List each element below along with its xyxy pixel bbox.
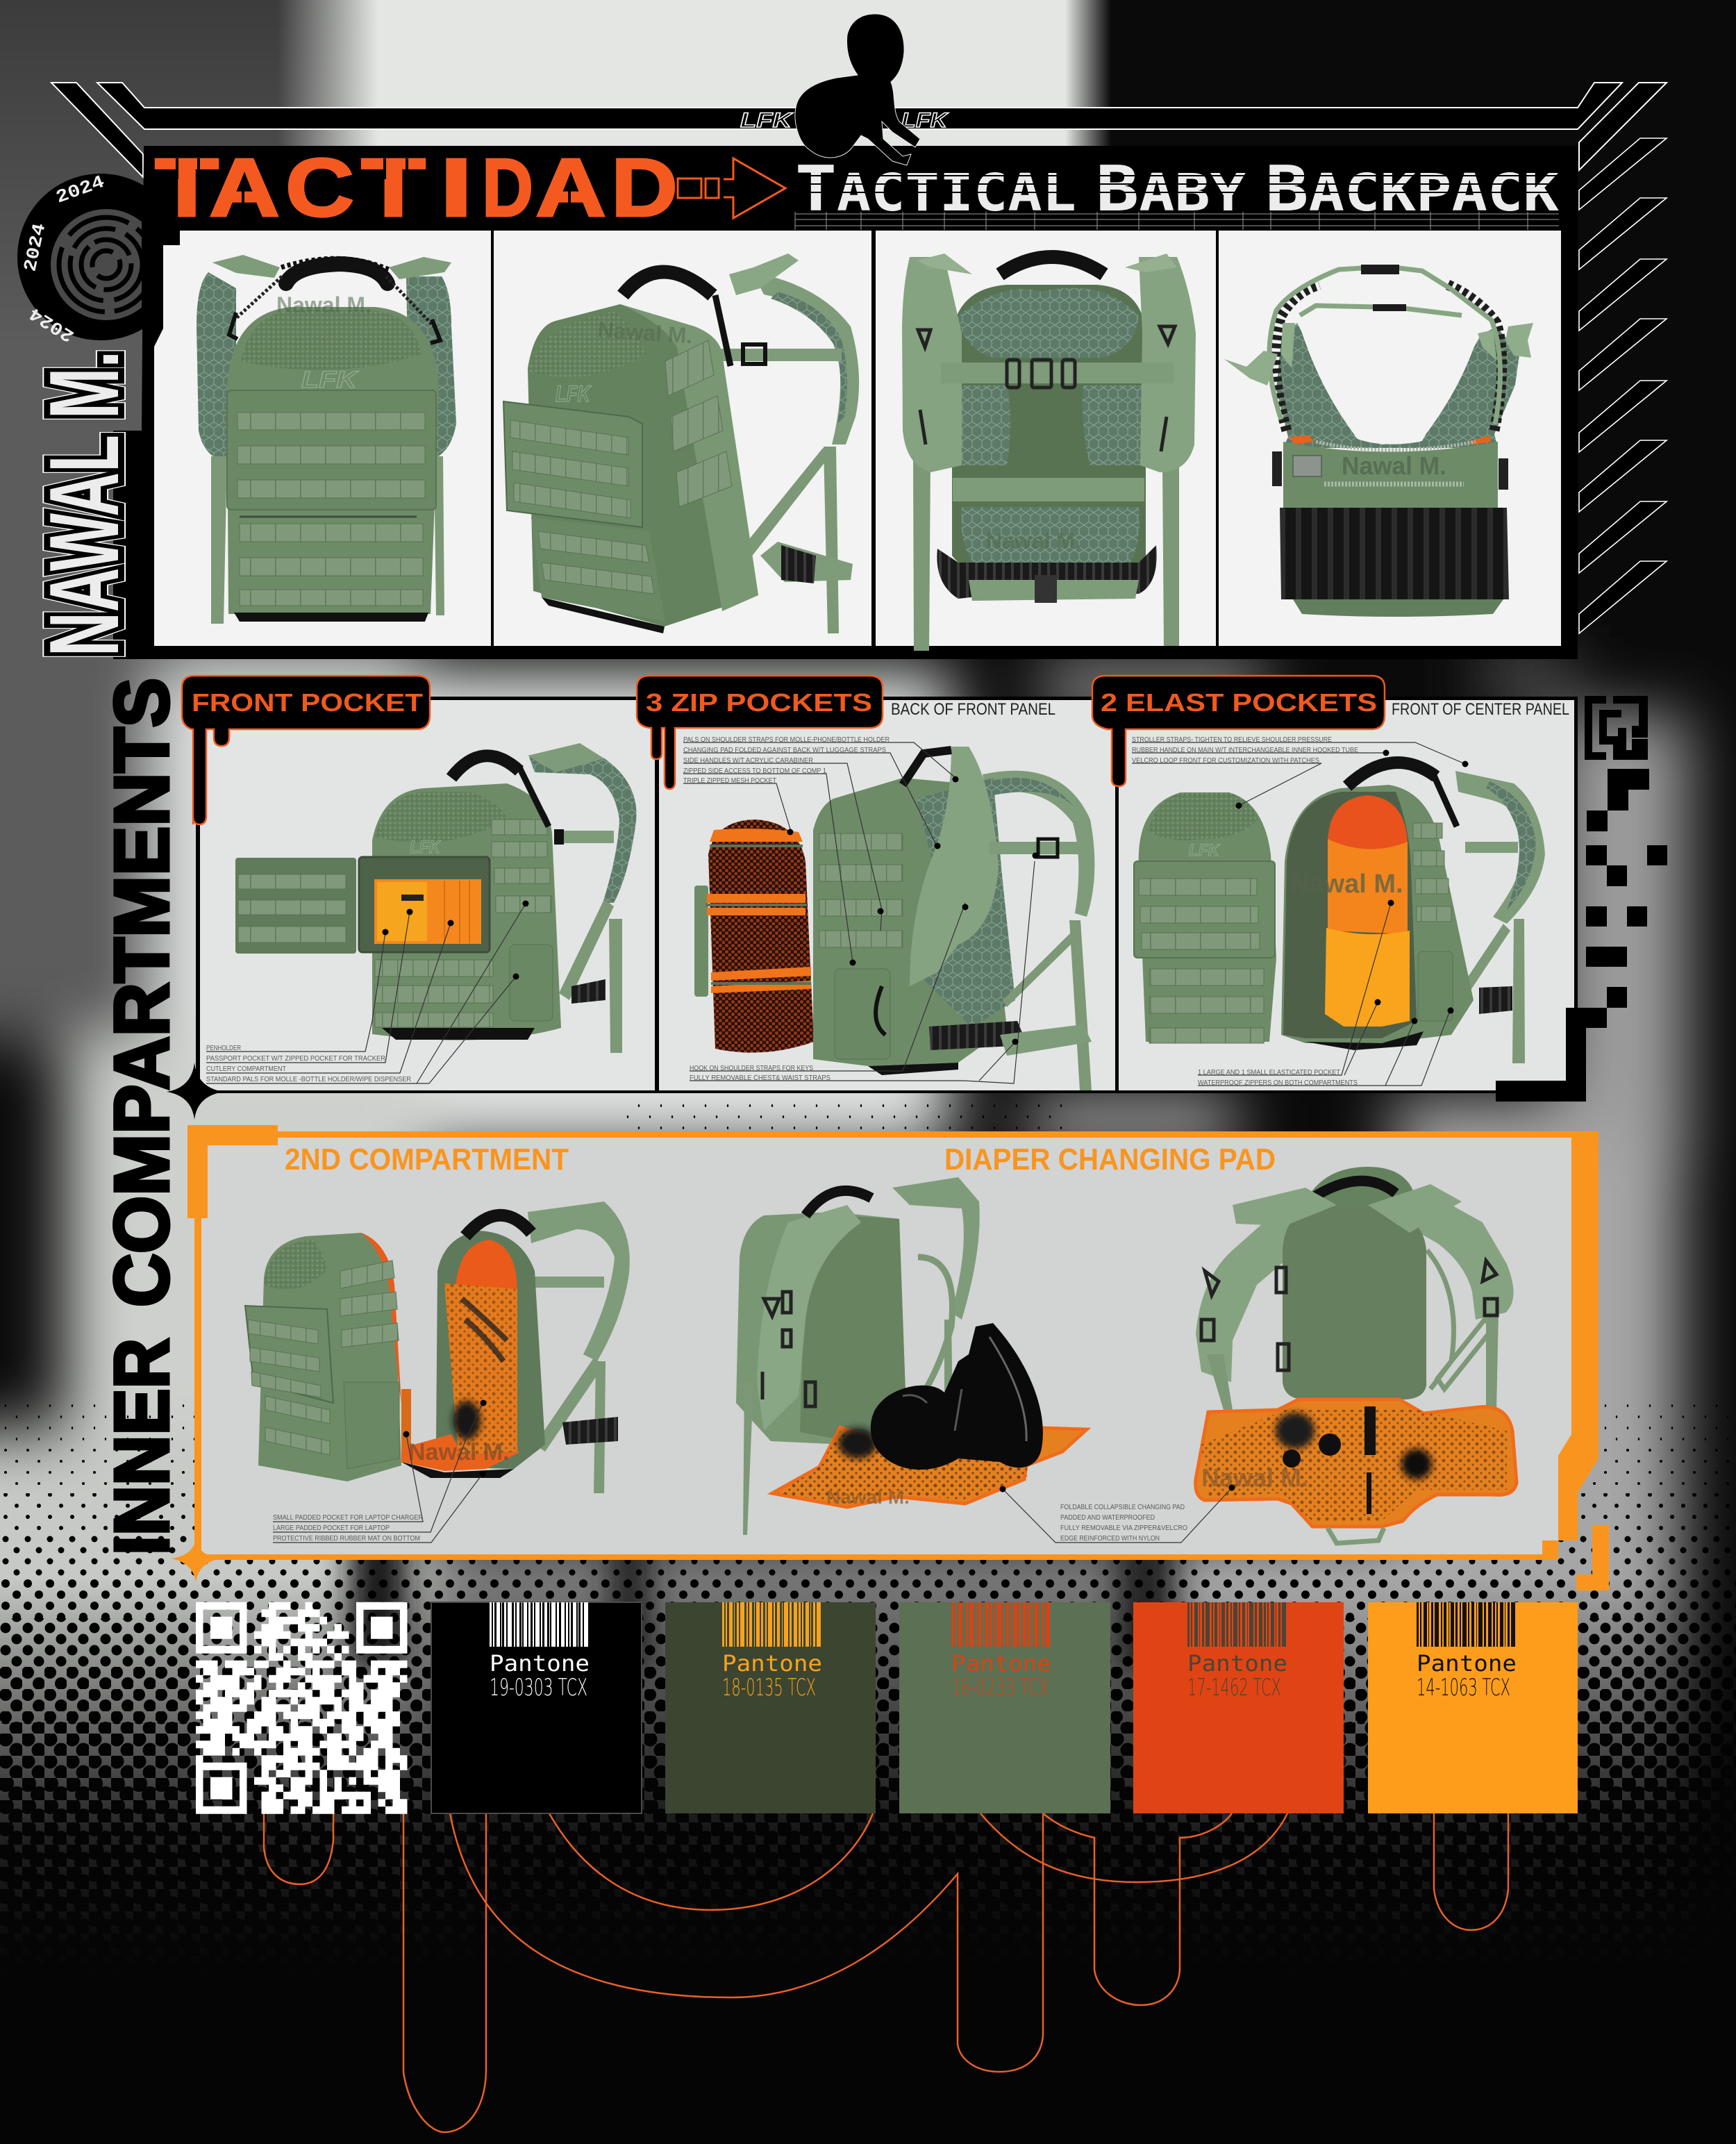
velcro patch — [241, 310, 422, 370]
logo: maze circle with 2024 ring — [17, 174, 144, 342]
zip pockets backpack — [813, 747, 1094, 1090]
panel: front view — [154, 231, 491, 646]
panel: back view — [876, 231, 1216, 651]
orange tips — [1290, 435, 1491, 444]
mesh straps — [1276, 323, 1519, 448]
bottom teeth — [234, 613, 428, 622]
side molle — [1413, 823, 1453, 1021]
mesh middle — [955, 385, 1142, 465]
pixel blocks and maze logo — [1585, 696, 1667, 1028]
leader dots: front pocket — [382, 900, 529, 979]
shoulder straps — [902, 257, 1196, 472]
heading: 2ND COMPARTMENT: 2ND COMPARTMENT — [285, 1142, 569, 1177]
front pocket backpack — [235, 743, 637, 1053]
open pocket — [359, 857, 490, 952]
leader dots: 2nd compartment — [403, 1400, 486, 1477]
chest strap — [719, 349, 842, 361]
swatch: 14-1063 TCX: Pantone — [1417, 1650, 1517, 1677]
panel: open harness view — [1219, 231, 1561, 646]
pad — [1196, 1399, 1517, 1527]
handle — [1347, 763, 1436, 786]
annotation text: changing pad: FOLDABLE COLLAPSIBLE CHANGING PAD — [1060, 1503, 1185, 1511]
annotation text: elastic pockets: 1 LARGE AND 1 SMALL ELASTICATED POCKET — [1198, 1068, 1341, 1077]
pad handle — [1328, 1528, 1384, 1543]
shoulders — [1196, 1202, 1514, 1382]
chest strap — [941, 363, 1174, 383]
swatch: 19-0303 TCX — [431, 1602, 642, 1813]
swatch: 19-0303 TCX: Pantone — [490, 1650, 590, 1677]
annotation text: elastic pockets: WATERPROOF ZIPPERS ON BOTH COMPARTMENTS — [1198, 1079, 1358, 1087]
interior — [1283, 792, 1417, 1038]
body — [1283, 442, 1498, 508]
leader lines: zip pockets — [683, 742, 1035, 1083]
subtitle: Tactical Baby Backpack: BABY — [1096, 153, 1246, 226]
top frame: outlined diagonal band — [51, 83, 1667, 177]
strap — [529, 757, 637, 903]
pack body — [736, 1212, 907, 1446]
annotation text: zip pockets: SIDE HANDLES W/T ACRYLIC CARABINER — [683, 756, 813, 765]
leader dots: zip pockets — [787, 776, 1039, 1045]
annotation text: 2nd compartment: PROTECTIVE RIBBED RUBBER MAT ON BOTTOM — [273, 1534, 420, 1543]
side buckles — [1272, 451, 1282, 486]
logo: maze circle with 2024 ring: 2024 — [53, 172, 107, 208]
watermark: Nawal M. — [986, 529, 1081, 554]
label: BACK OF FRONT PANEL: BACK OF FRONT PANEL — [891, 700, 1055, 719]
swatch: 17-1462 TCX — [1133, 1602, 1344, 1813]
tab: FRONT POCKET — [182, 676, 430, 824]
top shell — [1302, 1167, 1417, 1222]
annotation text: zip pockets: TRIPLE ZIPPED MESH POCKET — [683, 776, 776, 785]
section heading: INNER COMPARTMENTS: INNER — [99, 1338, 185, 1555]
annotation text: changing pad: PADDED AND WATERPROOFED — [1060, 1513, 1155, 1522]
elastic pockets: detached board: LFK — [1189, 841, 1221, 860]
LFK logo: LFK — [556, 381, 592, 406]
hanging straps — [913, 458, 1179, 651]
icon: black star — [167, 1063, 224, 1120]
molle rows — [237, 413, 425, 606]
title: TACTIDAD: D — [611, 142, 678, 234]
velcro — [529, 311, 646, 377]
watermark: Nawal M. — [1201, 1463, 1308, 1492]
annotation text: zip pockets: ZIPPED SIDE ACCESS TO BOTTOM OF COMP 1 — [683, 767, 826, 775]
icon: title arrow — [678, 158, 785, 218]
LFK logo: LFK — [410, 836, 442, 857]
swatch: 14-1063 TCX — [1368, 1602, 1578, 1813]
molle — [819, 833, 903, 1059]
buckles — [762, 1292, 815, 1406]
mesh top — [958, 288, 1139, 358]
zipper line — [240, 515, 417, 518]
tab: 2 ELAST POCKETS: 2 ELAST POCKETS — [1101, 688, 1377, 717]
lining: red top — [1328, 795, 1408, 851]
body — [813, 778, 1007, 1066]
background: halftone dot bands — [0, 1096, 1736, 2144]
harness webbing — [1269, 268, 1500, 424]
leader lines: changing pad — [1003, 1488, 1232, 1543]
watermark: Nawal M. — [1342, 451, 1446, 480]
annotation text: front pocket: CUTLERY COMPARTMENT — [206, 1065, 287, 1073]
2nd compartment: detached section — [245, 1233, 411, 1481]
body — [1281, 785, 1474, 1043]
annotation text: elastic pockets — [1132, 736, 1358, 1087]
waist belt — [937, 545, 1157, 599]
frame corner bracket — [1496, 1008, 1586, 1102]
hanging straps — [1207, 1313, 1499, 1410]
shoulder strap — [753, 272, 859, 444]
straps — [729, 447, 839, 633]
buckles — [1361, 265, 1399, 274]
annotation text: changing pad — [1060, 1503, 1187, 1543]
leader dots: elastic pockets — [1236, 750, 1468, 1024]
inner opening cut — [1300, 307, 1479, 444]
lining top — [455, 1240, 517, 1292]
annotation text: front pocket: STANDARD PALS FOR MOLLE -BOTTLE HOLDER/WIPE DISPENSER — [206, 1075, 411, 1083]
floor — [401, 1434, 521, 1471]
tab: FRONT POCKET: FRONT POCKET — [192, 688, 423, 717]
annotation text: changing pad: FULLY REMOVABLE VIA ZIPPER&VELCRO — [1060, 1524, 1187, 1532]
shoulders and handle — [212, 255, 451, 279]
swatch: 18-0135 TCX: 18-0135 TCX — [722, 1674, 816, 1702]
title: TACTIDAD — [155, 142, 678, 234]
buckles — [1201, 1261, 1497, 1370]
2nd compartment: open backpack — [401, 1202, 630, 1493]
decorative orange drip outlines — [264, 1813, 1508, 2132]
tab: 3 ZIP POCKETS — [637, 676, 883, 789]
title: TACTIDAD: T — [361, 142, 426, 234]
strap tail — [743, 1382, 753, 1535]
annotation text: front pocket: PENHOLDER — [206, 1044, 241, 1052]
subtitle: Tactical Baby Backpack — [792, 153, 1562, 230]
handle — [1309, 1181, 1396, 1200]
ribbed rubber — [1280, 508, 1509, 599]
mesh lower — [961, 507, 1140, 571]
front pocket — [227, 390, 436, 510]
title: TACTIDAD: I — [440, 142, 473, 234]
strap flaps — [1224, 323, 1533, 385]
body — [227, 307, 439, 614]
changing pad: floor mat with baby — [772, 1323, 1087, 1508]
logo: maze circle with 2024 ring: 2024 — [26, 303, 78, 347]
swatch: 16-0233 TCX — [899, 1602, 1110, 1813]
annotation text: zip pockets: FULLY REMOVABLE CHEST& WAIST STRAPS — [690, 1074, 831, 1082]
port — [1293, 456, 1321, 476]
tab: 2 ELAST POCKETS — [1092, 676, 1385, 786]
detached panel — [235, 858, 356, 954]
subtitle: Tactical Baby Backpack: TACTICAL — [795, 153, 1076, 226]
body shell — [436, 1231, 545, 1469]
title: TACTIDAD: C — [285, 142, 354, 234]
changing pad: backpack side view — [736, 1177, 980, 1535]
far strap — [892, 1177, 980, 1320]
glossy baby figure — [871, 1323, 1043, 1470]
QR code — [196, 1606, 407, 1810]
swatch: 18-0135 TCX — [665, 1602, 876, 1813]
annotation text: 2nd compartment: LARGE PADDED POCKET FOR LAPTOP — [273, 1524, 390, 1532]
lining: yellow pocket — [1325, 928, 1410, 1027]
leader lines: front pocket — [206, 904, 526, 1083]
elastic pockets: detached board — [1134, 792, 1276, 1043]
annotation text: elastic pockets: STROLLER STRAPS- TIGHTEN TO RELIEVE SHOULDER PRESSURE — [1132, 736, 1332, 744]
swatch: 14-1063 TCX: 14-1063 TCX — [1417, 1674, 1510, 1702]
swatch: 19-0303 TCX: 19-0303 TCX — [490, 1674, 587, 1702]
shoulder mesh straps — [197, 272, 456, 458]
panel — [1283, 1205, 1426, 1399]
far strap — [983, 771, 1094, 917]
zig-zag cords — [1276, 285, 1502, 431]
annotation text: 2nd compartment: SMALL PADDED POCKET FOR LAPTOP CHARGER — [273, 1513, 423, 1522]
body — [528, 304, 758, 626]
author name: NAWAL M.: NAWAL M. — [29, 351, 140, 656]
panel: inner compartments frame — [171, 1125, 1609, 1590]
annotation text: zip pockets — [683, 736, 890, 1082]
lining pocket — [444, 1283, 517, 1455]
watermark: Nawal M. — [408, 1439, 509, 1465]
band logos: LFK — [901, 109, 949, 132]
band logos: LFK — [740, 109, 794, 132]
label: FRONT OF CENTER PANEL: FRONT OF CENTER PANEL — [1392, 700, 1569, 719]
annotation text: changing pad: EDGE REINFORCED WITH NYLON — [1060, 1534, 1160, 1543]
side molle — [375, 820, 553, 1027]
annotation text: front pocket: PASSPORT POCKET W/T ZIPPED POCKET FOR TRACKER — [206, 1054, 385, 1063]
strap — [1455, 771, 1545, 924]
lower strap — [953, 478, 1144, 501]
straps and belt — [1003, 920, 1092, 1090]
chest strap — [990, 842, 1087, 854]
title: TACTIDAD: D — [482, 142, 533, 234]
shoulder strap near — [757, 1205, 861, 1431]
compartments frame — [196, 697, 1578, 1093]
side molle — [665, 340, 732, 507]
lower pocket — [531, 517, 665, 622]
hanging straps — [211, 456, 444, 624]
watermark: Nawal M. — [276, 292, 372, 317]
section heading: INNER COMPARTMENTS: COMPARTMENTS — [99, 678, 185, 1307]
annotation text: zip pockets: CHANGING PAD FOLDED AGAINST BACK W/T LUGGAGE STRAPS — [683, 746, 886, 754]
logo: maze circle with 2024 ring: 2024 — [19, 222, 50, 274]
mesh pocket panel — [694, 820, 814, 1053]
body — [952, 285, 1146, 583]
subtitle: Tactical Baby Backpack: BACKPACK — [1265, 153, 1560, 226]
near strap — [910, 747, 999, 986]
heading: DIAPER CHANGING PAD: DIAPER CHANGING PAD — [944, 1142, 1276, 1177]
icon: crawling baby silhouette — [795, 14, 920, 165]
zipper — [1324, 482, 1464, 486]
handle — [451, 756, 519, 778]
tab: 3 ZIP POCKETS: 3 ZIP POCKETS — [646, 688, 872, 717]
handle — [623, 272, 712, 295]
watermark: Nawal M. — [826, 1486, 910, 1508]
handle — [1000, 257, 1104, 274]
back panel — [800, 1215, 907, 1446]
annotation text: elastic pockets: RUBBER HANDLE ON MAIN W/T INTERCHANGEABLE INNER HOOKED TUBE — [1132, 746, 1358, 754]
handle — [465, 1215, 531, 1236]
title: TACTIDAD: A — [535, 142, 606, 234]
swatch: 18-0135 TCX: Pantone — [722, 1650, 822, 1677]
handle — [903, 750, 951, 785]
front pocket — [503, 401, 642, 527]
strap — [528, 1202, 630, 1361]
waist belt — [760, 542, 853, 582]
panel: three-quarter view — [494, 231, 871, 646]
annotation text: elastic pockets: VELCRO LOOP FRONT FOR CUSTOMIZATION WITH PATCHES — [1132, 756, 1319, 765]
changing pad: backpack rear view — [1196, 1167, 1517, 1543]
author name: NAWAL M. — [29, 351, 140, 656]
watermark: Nawal M. — [597, 317, 694, 349]
swatch: 17-1462 TCX: 17-1462 TCX — [1187, 1674, 1281, 1702]
watermark: Nawal M. — [1290, 870, 1403, 899]
author name: NAWAL M.: NAWAL M. — [29, 351, 140, 656]
lining: orange pocket — [1328, 839, 1408, 934]
leader dots: changing pad — [1000, 1485, 1235, 1492]
main black frame — [113, 146, 1578, 659]
shoulder caps — [1233, 1184, 1462, 1233]
bottom lip — [1293, 599, 1503, 617]
band logos — [740, 109, 949, 132]
body — [372, 783, 561, 1040]
swatch: 17-1462 TCX: Pantone — [1187, 1650, 1287, 1677]
leader lines: 2nd compartment — [273, 1403, 483, 1543]
title: TACTIDAD: A — [209, 142, 280, 234]
elastic pockets: open backpack — [1281, 763, 1545, 1063]
LFK logo: LFK — [301, 367, 359, 393]
annotation text: 2nd compartment — [273, 1513, 423, 1543]
handle — [806, 1190, 871, 1215]
leader lines: elastic pockets — [1132, 742, 1465, 1086]
swatch: 16-0233 TCX: Pantone — [951, 1650, 1051, 1677]
annotation text: zip pockets: PALS ON SHOULDER STRAPS FOR MOLLE-PHONE/BOTTLE HOLDER — [683, 736, 890, 744]
annotation text: zip pockets: HOOK ON SHOULDER STRAPS FOR KEYS — [690, 1064, 813, 1072]
annotation text: front pocket — [206, 1044, 411, 1083]
swatch: 16-0233 TCX: 16-0233 TCX — [951, 1674, 1049, 1702]
right diagonal hatching — [1579, 138, 1667, 633]
title: TACTIDAD: T — [155, 142, 219, 234]
